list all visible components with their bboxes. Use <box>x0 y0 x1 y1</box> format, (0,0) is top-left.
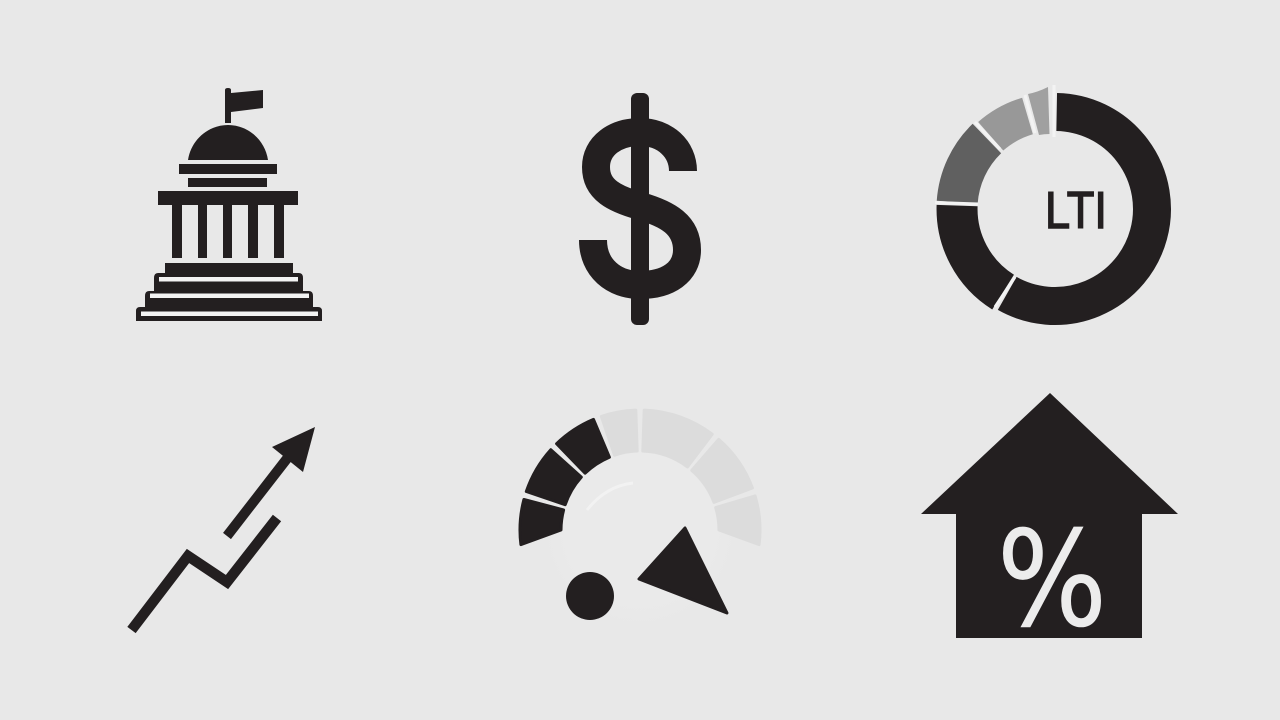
gauge hub <box>566 572 614 620</box>
gauge inner glow <box>540 430 740 630</box>
gauge faint arc <box>587 483 633 510</box>
percent sign: % <box>997 503 1107 657</box>
icon: gauge meter <box>520 410 760 630</box>
steps <box>136 263 322 321</box>
columns <box>172 205 284 258</box>
dome <box>188 125 268 160</box>
icon: rising arrow <box>132 427 315 630</box>
gauge needle <box>639 528 727 613</box>
step highlights <box>141 277 318 316</box>
icon: government building <box>136 88 322 321</box>
dome base <box>179 164 277 187</box>
icon: house with percent <box>921 393 1178 657</box>
dark gauge segments <box>520 419 609 545</box>
donut label: LTI <box>1045 182 1107 240</box>
light gauge segments <box>601 410 760 545</box>
icon: dollar sign <box>593 93 687 325</box>
donut chart: LTI <box>935 85 1152 307</box>
flag <box>225 88 263 123</box>
entablature <box>158 191 298 205</box>
